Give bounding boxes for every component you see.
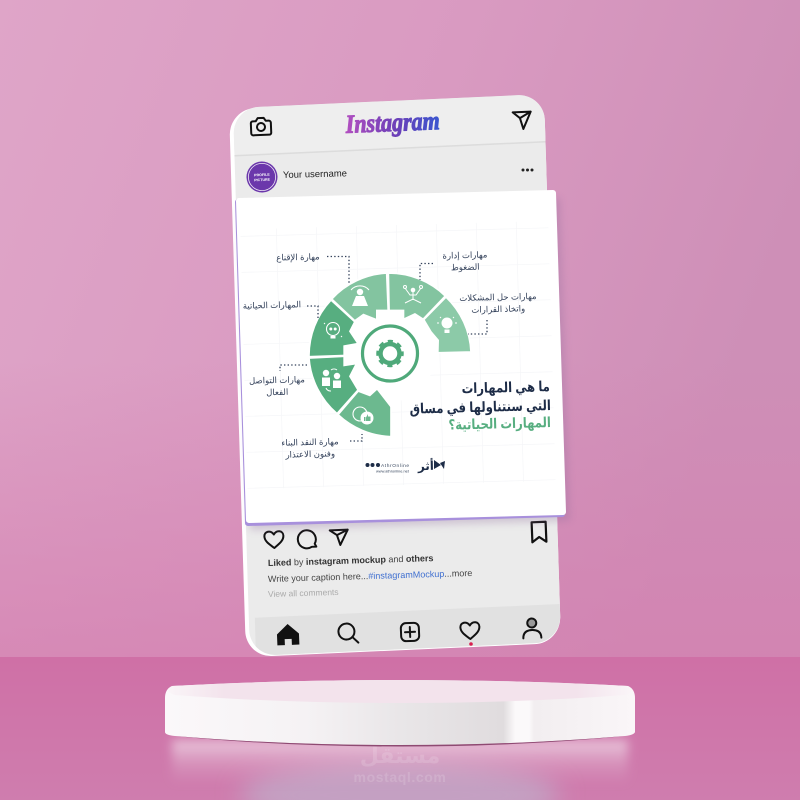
label: persuasion: مهارة الإقناع	[276, 251, 320, 264]
connector: critique	[350, 434, 362, 441]
icon: profile	[523, 618, 541, 638]
phone mockup	[229, 94, 561, 658]
label: critique: مهارة النقد البناء	[281, 436, 339, 448]
social handles	[366, 463, 410, 474]
heading: التي سنتناولها في مساق	[409, 397, 551, 417]
connector: life skills	[307, 306, 318, 320]
social handles: www.athronline.net	[376, 468, 410, 474]
connector: communication	[280, 365, 307, 371]
podium	[165, 680, 635, 746]
connector: problem solving	[468, 320, 487, 334]
icon: more dots	[522, 168, 534, 172]
gear chart	[309, 273, 471, 437]
profile avatar	[246, 161, 278, 193]
icon: search	[338, 623, 358, 643]
label: communication: الفعال	[266, 387, 288, 397]
label: problem solving: واتخاذ القرارات	[471, 303, 525, 315]
icon: meditating person	[351, 286, 369, 306]
card face	[239, 193, 563, 520]
icon: add	[401, 623, 419, 641]
podium contact shadow	[175, 736, 625, 746]
icon: camera	[251, 118, 271, 135]
label: communication: مهارات التواصل	[249, 374, 305, 386]
heading: المهارات الحياتية؟	[448, 414, 551, 433]
podium side	[165, 680, 635, 745]
username: Your username	[283, 168, 347, 181]
icon: stress figure	[404, 286, 422, 303]
brand logo: أثر	[417, 458, 434, 473]
icon: brain bulb	[324, 322, 342, 338]
notification dot	[469, 642, 473, 646]
heading: ما هي المهارات	[461, 378, 550, 397]
watermark: mostaql.com	[354, 769, 446, 785]
likes line: Liked by instagram mockup and others	[268, 553, 434, 568]
sector: persuasion	[332, 273, 390, 354]
brand logo	[417, 458, 445, 473]
label: problem solving: مهارات حل المشكلات	[459, 291, 537, 303]
watermark: مستقل	[360, 743, 440, 768]
social handles: AthrOnline	[381, 463, 410, 469]
label: critique: وفنون الاعتذار	[284, 448, 335, 460]
central ring gear icon	[362, 326, 418, 381]
phone body	[229, 94, 561, 658]
profile avatar: PROFILE	[254, 173, 270, 177]
label: stress management: الضغوط	[451, 262, 480, 272]
sector: communication	[309, 354, 390, 414]
sector: critique	[338, 354, 391, 437]
icon: two people	[322, 369, 341, 391]
icon: speech bubble thumbs up	[353, 407, 374, 424]
watermark	[354, 743, 446, 785]
card edge	[238, 194, 562, 523]
profile avatar: PICTURE	[254, 178, 271, 182]
sector: stress	[388, 273, 445, 354]
icon: heart	[264, 531, 284, 548]
label: stress management: مهارات إدارة	[442, 249, 488, 262]
card shadow	[240, 198, 570, 530]
Instagram logo: Instagram	[344, 106, 440, 139]
icon: bookmark	[532, 522, 546, 542]
heading	[409, 378, 551, 433]
sector: problem solving	[390, 297, 471, 354]
floor	[0, 657, 800, 800]
icon: home	[277, 624, 299, 645]
view comments: View all comments	[268, 587, 339, 599]
connector: stress	[420, 264, 433, 280]
podium top	[168, 680, 632, 703]
sector: life skills	[309, 300, 390, 357]
post card	[238, 193, 570, 530]
icon: comment	[297, 530, 316, 549]
caption line: Write your caption here...#instagramMockup...more	[268, 568, 472, 584]
icon: activity heart	[460, 622, 480, 639]
grid	[240, 221, 555, 489]
icon: share	[330, 530, 348, 545]
icon: send	[513, 112, 531, 129]
white gear	[343, 310, 439, 408]
icon: light bulb	[437, 317, 457, 333]
label: life skills: المهارات الحياتية	[243, 299, 301, 311]
connector: persuasion	[327, 256, 349, 283]
